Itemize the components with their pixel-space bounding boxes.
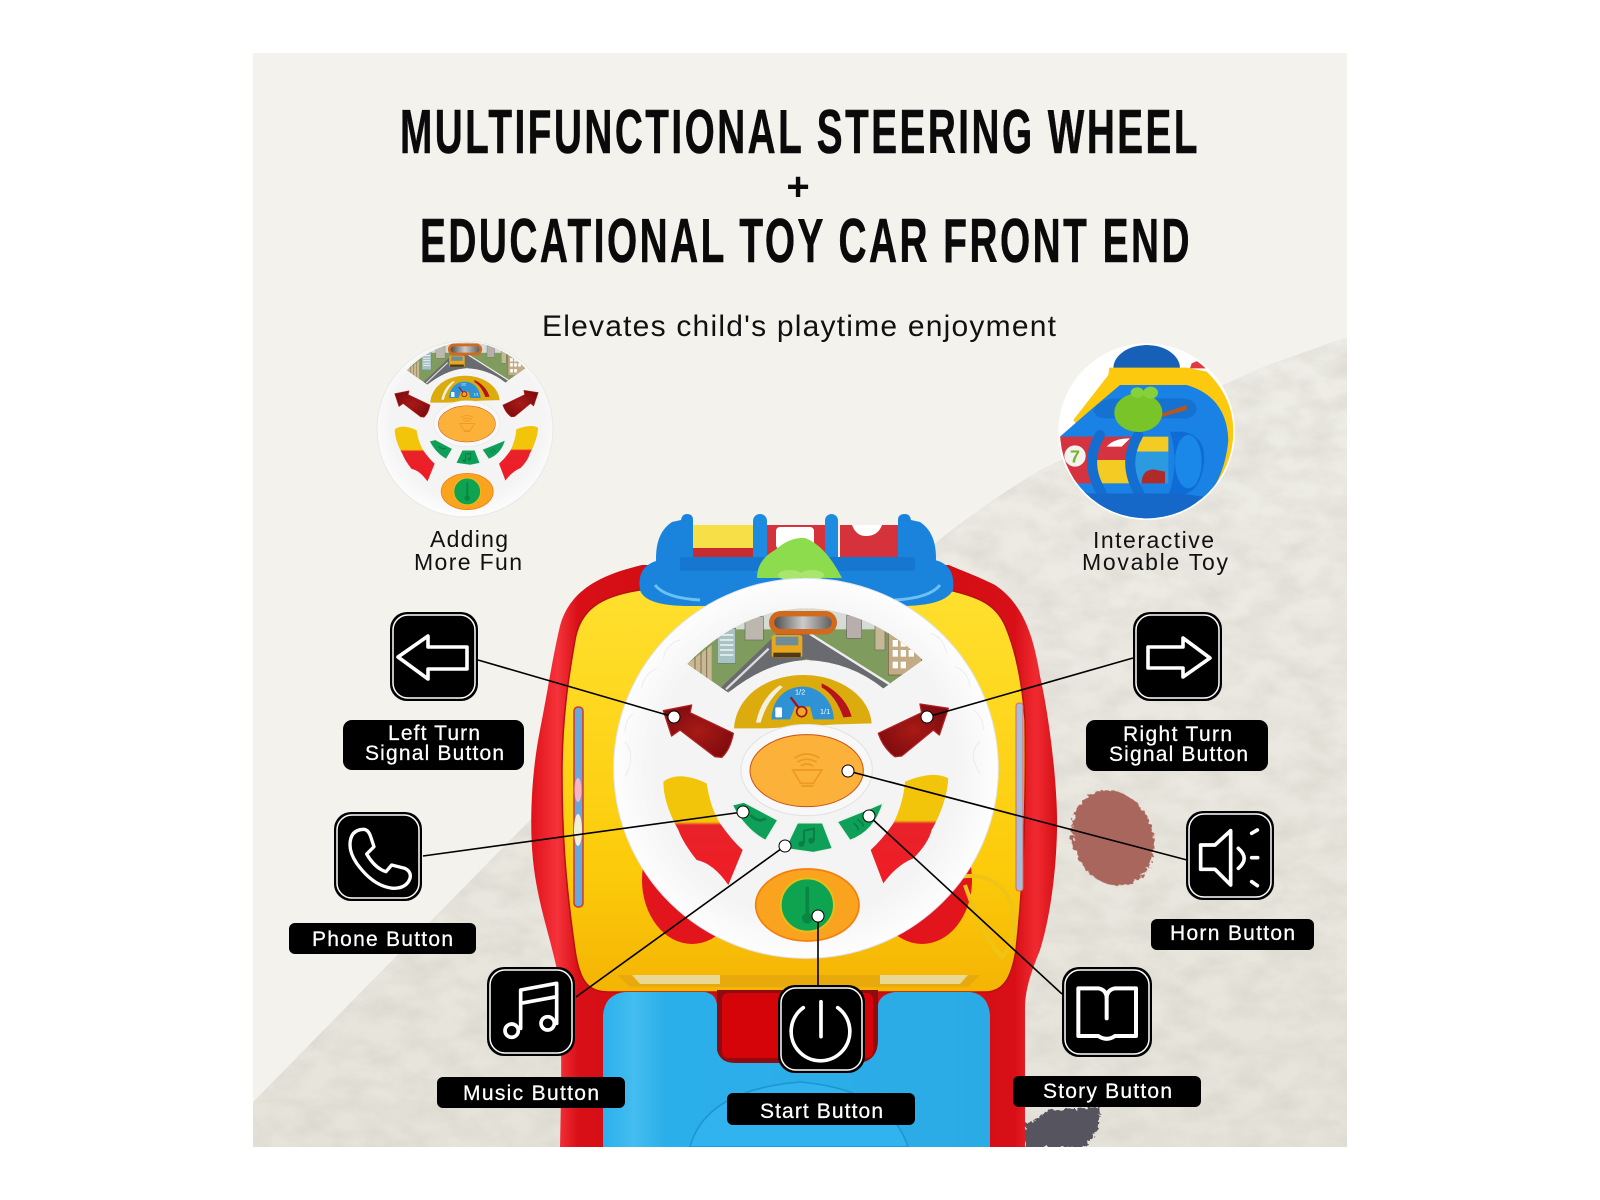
label: Signal Button (365, 742, 504, 765)
callout: right turn signal (1086, 612, 1268, 771)
red bumps behind wheel (642, 867, 972, 944)
callout: start (727, 985, 915, 1125)
top blue toy base (639, 514, 953, 606)
subtitle: Elevates child's playtime enjoyment (542, 310, 1057, 343)
red stain on rug (1058, 778, 1168, 898)
label (437, 1077, 625, 1108)
feature circle: interactive movable toy (1058, 343, 1235, 575)
label: Start Button (760, 1100, 883, 1123)
feature circle: interactive movable toy: Movable Toy (1082, 549, 1228, 575)
icon: left arrow (390, 612, 478, 701)
callout: story (1013, 967, 1201, 1107)
right sticker (1016, 703, 1023, 891)
label: Story Button (1043, 1080, 1172, 1103)
icon: music note (487, 967, 575, 1056)
label: Phone Button (312, 928, 453, 951)
red body (531, 565, 1057, 1147)
icon: power (778, 985, 865, 1073)
left sticker (574, 707, 583, 907)
bottom slot strip (617, 975, 980, 987)
feature circle: interactive movable toy: 7 (1070, 447, 1080, 467)
yellow cord (960, 876, 1013, 957)
icon: speaker (1186, 811, 1274, 900)
callout lines and dots (423, 658, 1187, 997)
title: + (786, 165, 810, 209)
steering wheel (614, 578, 998, 958)
feature circle: interactive movable toy: Interactive (1093, 527, 1214, 553)
callout: left turn signal (343, 612, 524, 770)
label (1086, 720, 1268, 771)
toy car (531, 514, 1057, 1147)
yellow front panel (562, 590, 1025, 992)
blue seat (603, 990, 990, 1147)
label: Signal Button (1109, 743, 1248, 766)
feature circle: adding more fun (376, 340, 554, 570)
icon: book (1062, 967, 1152, 1057)
callout: music (437, 967, 625, 1108)
icon: right arrow (1133, 612, 1222, 701)
dark stain on rug (1025, 1107, 1100, 1147)
feature circle: adding more fun: More Fun (414, 549, 522, 575)
title (400, 98, 1200, 276)
icon: phone (334, 812, 422, 901)
label: Right Turn (1123, 723, 1232, 746)
label (1013, 1076, 1201, 1107)
callout: horn (1151, 811, 1314, 950)
label (289, 923, 476, 954)
background panel (253, 53, 1347, 1147)
feature circle: adding more fun: Adding (430, 526, 508, 552)
label (727, 1093, 915, 1125)
label: Left Turn (388, 722, 480, 745)
label: Music Button (463, 1082, 599, 1105)
callout: phone (289, 812, 476, 954)
label (1151, 919, 1314, 950)
label (343, 720, 524, 770)
label: Horn Button (1170, 922, 1295, 945)
